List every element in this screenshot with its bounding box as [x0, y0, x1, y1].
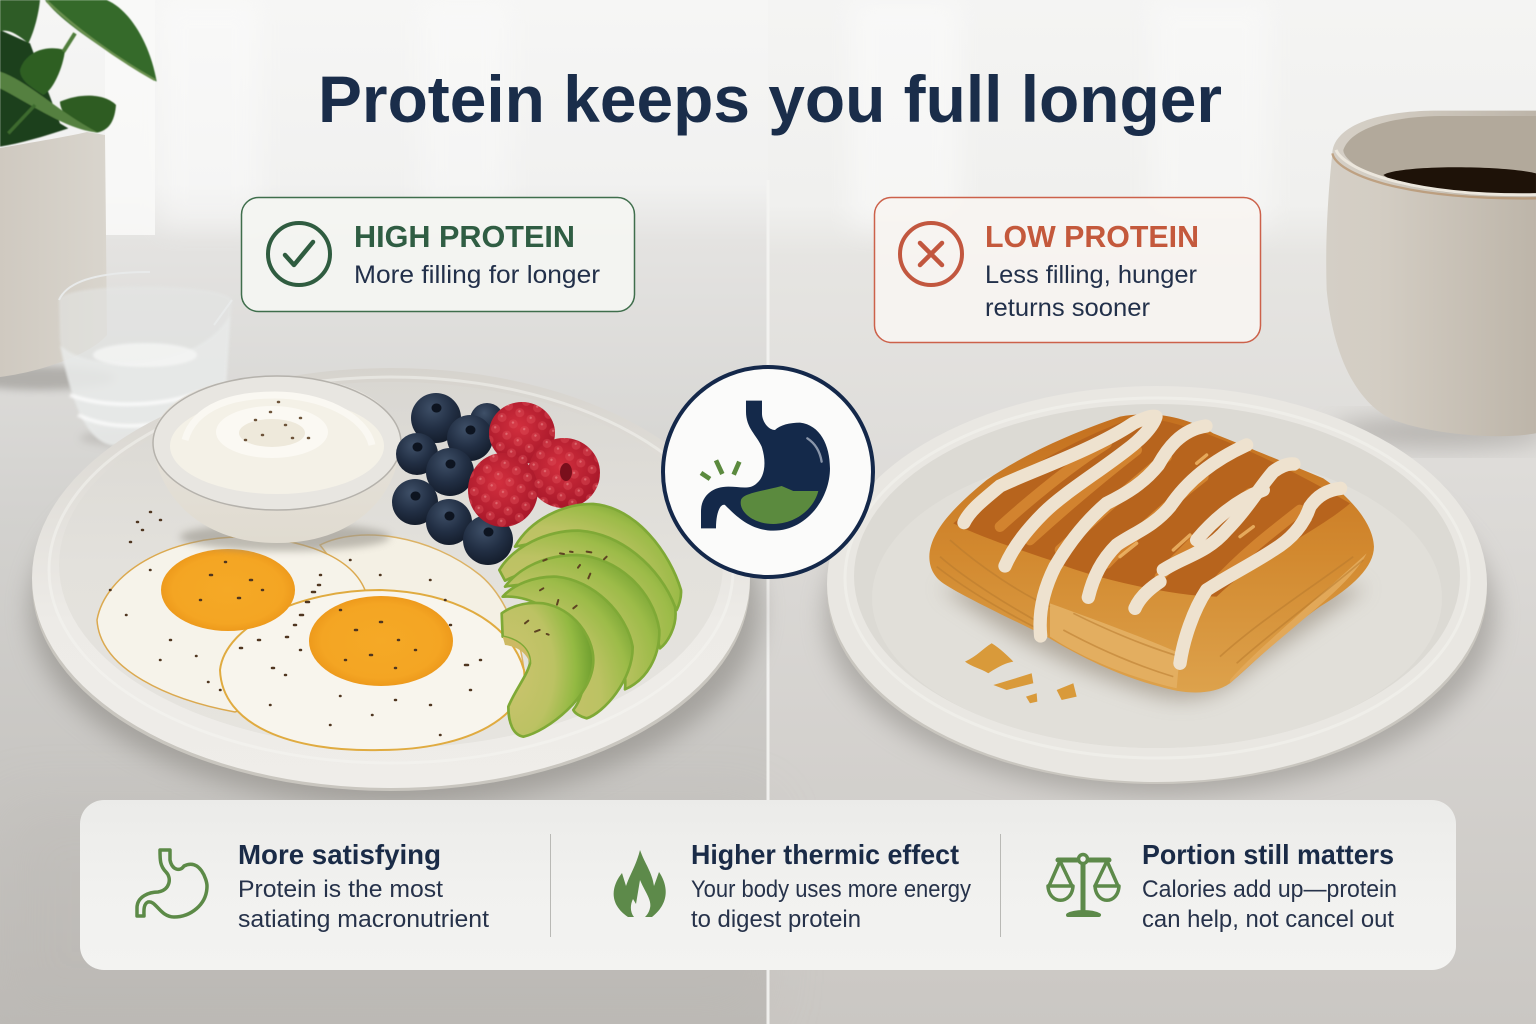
yolk: right	[309, 596, 453, 686]
fact: thermic effect: to digest protein	[691, 906, 861, 933]
title: Protein keeps you full longer	[318, 62, 1222, 136]
fact: more satisfying: satiating macronutrient	[238, 906, 489, 933]
heading: high protein: HIGH PROTEIN	[354, 219, 575, 254]
fried eggs	[97, 512, 525, 750]
pastry	[929, 414, 1374, 703]
yogurt bowl	[153, 376, 401, 551]
text: low protein description: returns sooner	[985, 294, 1150, 322]
icon: stomach	[701, 401, 830, 531]
center divider	[766, 180, 770, 1024]
avocado slices	[499, 504, 681, 737]
fact: thermic effect: Higher thermic effect	[691, 839, 959, 870]
panel: high protein	[242, 198, 634, 312]
pepper specks	[110, 512, 481, 735]
high protein plate	[30, 368, 760, 805]
heading: low protein: LOW PROTEIN	[985, 219, 1199, 254]
fact: thermic effect	[691, 839, 971, 933]
fact: more satisfying	[238, 839, 489, 933]
icon: scales	[1048, 854, 1119, 915]
text: low protein description	[985, 261, 1197, 322]
icon: stomach outline	[137, 850, 207, 917]
blueberries	[392, 393, 513, 565]
fact: thermic effect: Your body uses more energy	[691, 876, 971, 903]
fact: portion: Calories add up—protein	[1142, 876, 1397, 903]
coffee cup	[1326, 111, 1536, 448]
icon: check	[268, 223, 330, 285]
panel: key facts	[80, 800, 1456, 970]
yolk: left	[161, 549, 295, 631]
plant in pot	[0, 0, 157, 390]
crumbs	[965, 643, 1077, 703]
raspberries	[468, 402, 600, 527]
text: high protein description: More filling for longer	[354, 261, 600, 289]
low protein plate	[825, 386, 1495, 795]
center stomach badge	[663, 367, 873, 577]
text: low protein description: Less filling, hunger	[985, 261, 1197, 289]
panel: low protein	[874, 198, 1260, 342]
fact: portion: Portion still matters	[1142, 839, 1394, 870]
water glass	[59, 272, 232, 448]
fact: more satisfying: More satisfying	[238, 839, 441, 870]
fact: portion: can help, not cancel out	[1142, 906, 1394, 933]
icon: flame	[614, 850, 666, 917]
fact: more satisfying: Protein is the most	[238, 876, 443, 903]
icing drizzle	[964, 416, 1341, 663]
icon: cross	[900, 223, 962, 285]
fact: portion	[1142, 839, 1397, 933]
